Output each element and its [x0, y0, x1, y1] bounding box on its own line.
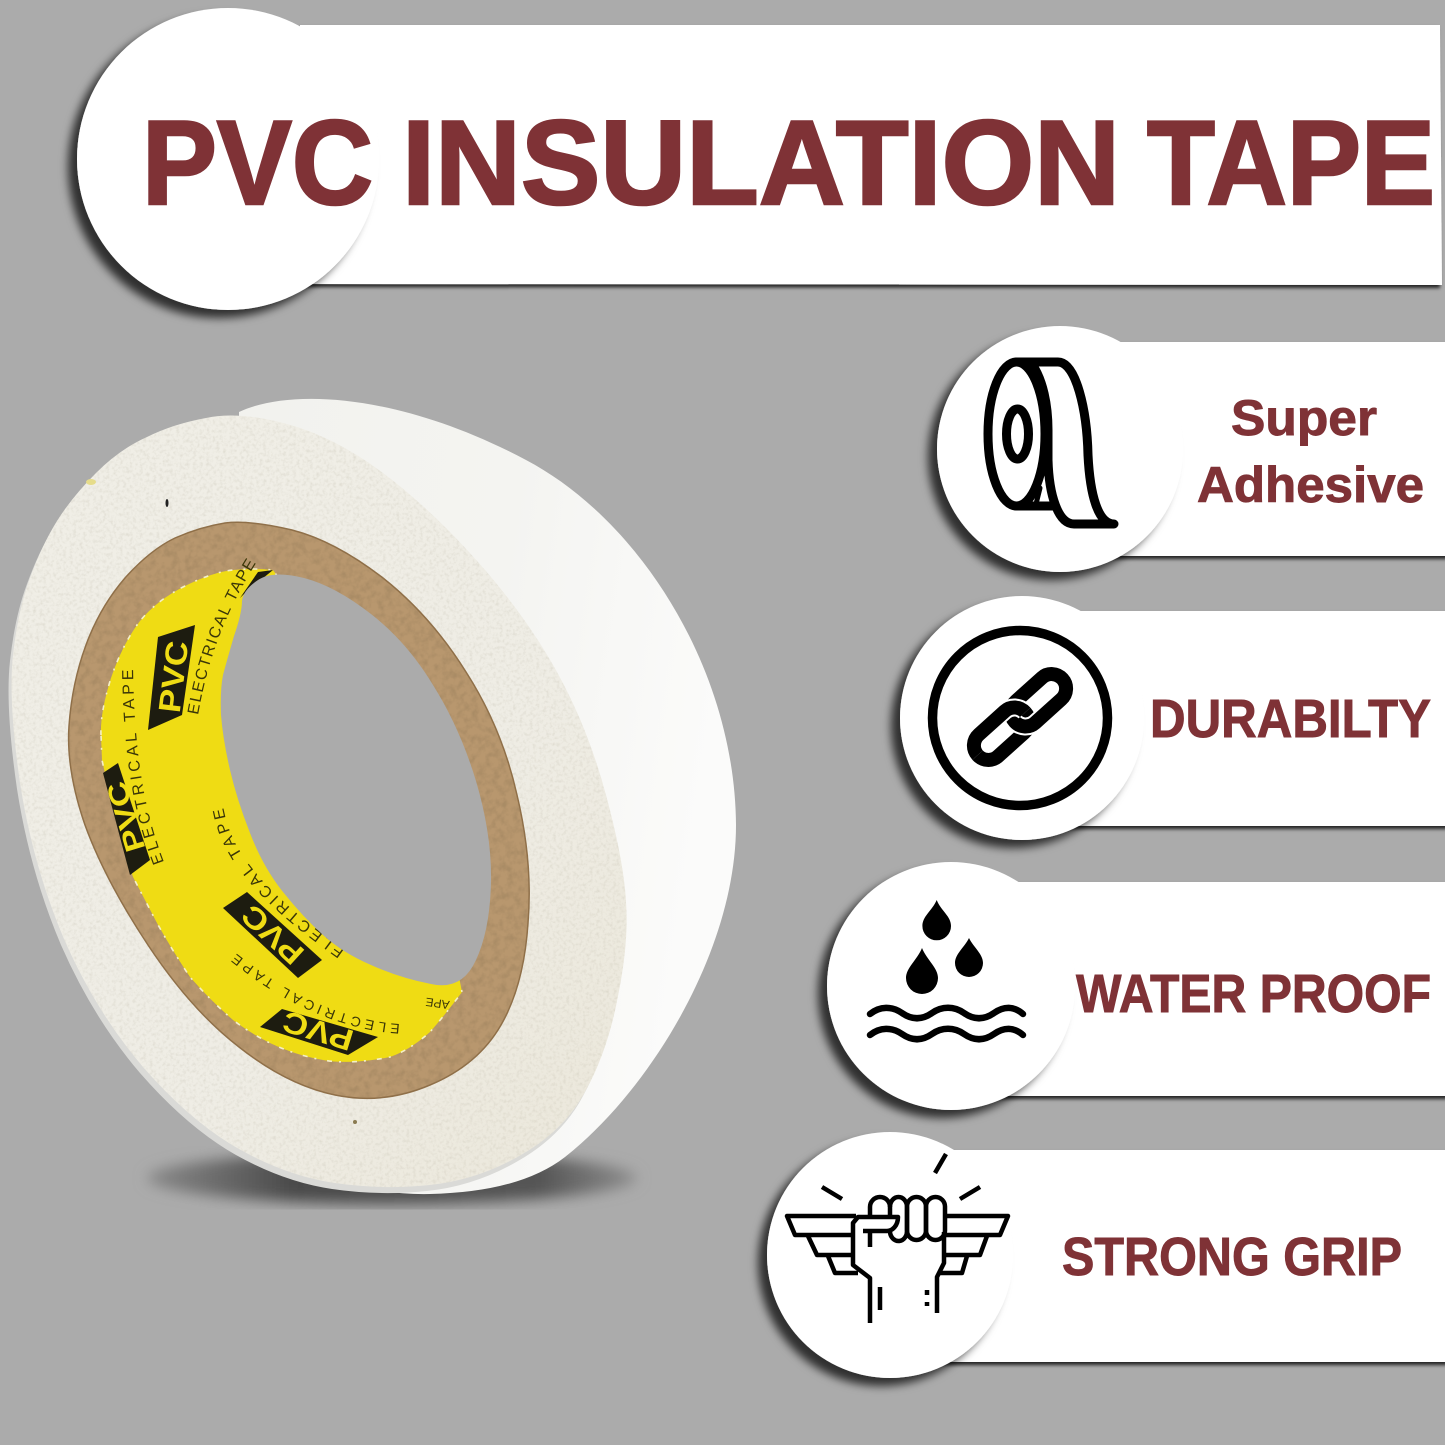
print: PVC block 3: [223, 892, 322, 978]
icon: chain link: [932, 630, 1108, 806]
feature bar: [990, 882, 1445, 1096]
icon: water drops and waves: [870, 900, 1023, 1039]
feature label: [1197, 390, 1424, 513]
core texture: [69, 522, 529, 1098]
print: PVC block 4: [260, 1004, 378, 1056]
print: electrical tape 4: ELECTRICAL TAPE: [231, 954, 399, 1034]
feature circle: [767, 1132, 1013, 1378]
feature bar: [930, 1150, 1445, 1362]
roll outer wall: [239, 399, 736, 1194]
print: electrical tape 1: ELECTRICAL TAPE: [187, 558, 256, 714]
cardboard core: [69, 522, 529, 1098]
feature: durability: [900, 596, 1445, 840]
banner bar: [300, 25, 1442, 285]
print: PVC block 2: PVC: [101, 778, 151, 856]
specks: [86, 479, 357, 1124]
face texture: [12, 416, 627, 1187]
title: INSULATION: [402, 96, 1120, 230]
print: electrical tape 2: ELECTRICAL TAPE: [122, 670, 164, 865]
print: electrical tape 3: ELECTRICAL TAPE: [212, 808, 344, 958]
feature: super adhesive: [937, 326, 1445, 572]
feature bar: [1100, 342, 1445, 556]
roll front face: [12, 416, 627, 1187]
print: PVC block 1: PVC: [152, 639, 195, 715]
feature label: Super: [1231, 390, 1377, 446]
print: small block at top of core: [240, 570, 273, 598]
feature bar: [1060, 611, 1445, 826]
print: PVC block 3: PVC: [235, 897, 311, 971]
icon: fist with wings: [787, 1154, 1008, 1323]
print: PVC block 2: [101, 763, 151, 875]
feature circle: [900, 596, 1144, 840]
print: cut-off text: APE: [425, 995, 450, 1012]
centre hole: [221, 574, 491, 985]
rear edge rim: [9, 422, 624, 1193]
feature label: STRONG GRIP: [1062, 1227, 1402, 1287]
print: PVC block 4: PVC: [279, 1004, 357, 1056]
title: PVC: [142, 96, 373, 230]
banner circle: [77, 8, 379, 310]
feature: strong grip: [767, 1132, 1445, 1378]
title: [142, 96, 1435, 230]
product photo: white tape roll: [8, 398, 736, 1210]
header banner: [77, 8, 1442, 310]
yellow core lining: [100, 558, 463, 1063]
feature circle: [827, 862, 1075, 1110]
icon: tape roll: [988, 362, 1114, 524]
ground shadow: [147, 1152, 637, 1204]
feature: water proof: [827, 862, 1445, 1110]
print: PVC block 1: [148, 625, 195, 730]
feature circle: [937, 326, 1183, 572]
feature label: Adhesive: [1197, 457, 1424, 513]
